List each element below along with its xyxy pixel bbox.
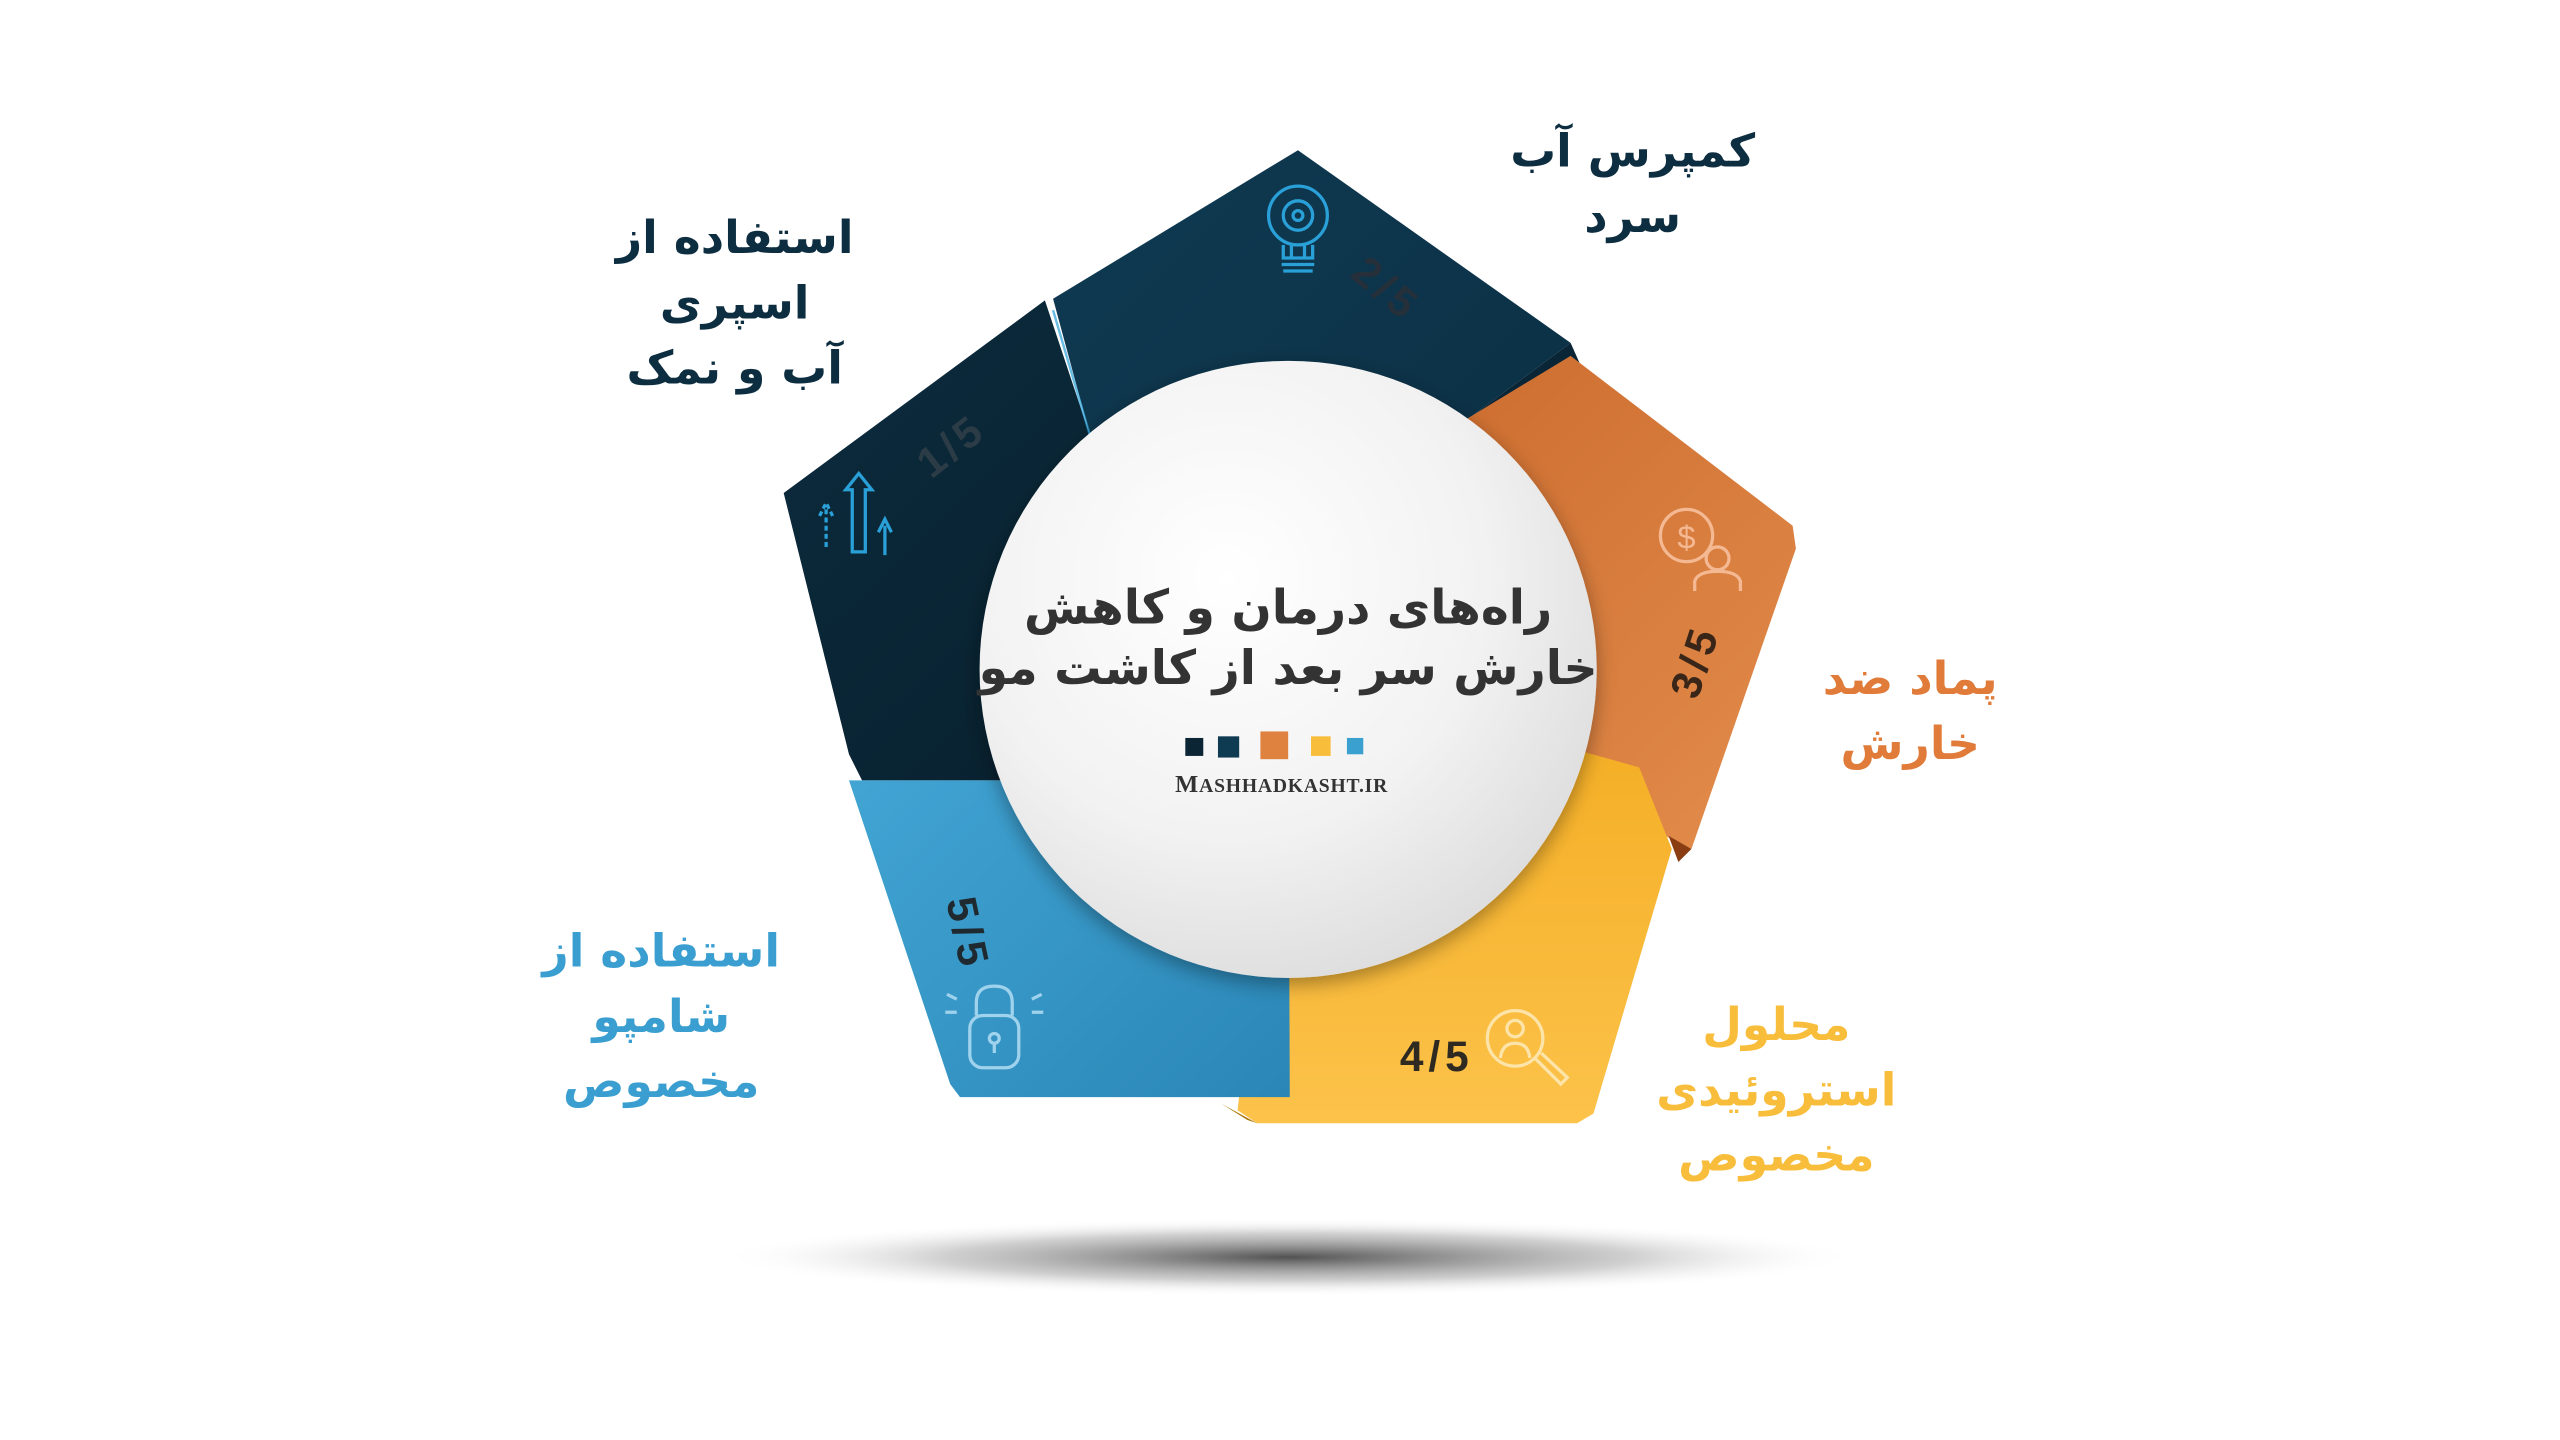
label: anti itch ointment: پماد ضد bbox=[1823, 652, 1998, 705]
segment 4/5 yellow bbox=[1221, 669, 1672, 1123]
label: special shampoo: استفاده از bbox=[540, 925, 780, 978]
label: steroid solution bbox=[1656, 998, 1896, 1182]
label: cold compress: کمپرس آب bbox=[1510, 123, 1756, 178]
floor shadow bbox=[717, 1218, 1860, 1296]
number 1/5: 1/5 bbox=[908, 404, 995, 487]
segment 1/5 dark navy bbox=[784, 300, 1288, 780]
label: anti itch ointment: خارش bbox=[1840, 717, 1980, 770]
icon: dollar person bbox=[1660, 509, 1740, 591]
label: anti itch ointment bbox=[1823, 652, 1998, 770]
label: salt water spray: آب و نمک bbox=[626, 340, 844, 395]
label: special shampoo bbox=[540, 925, 780, 1108]
icon: person magnifier bbox=[1487, 1011, 1567, 1084]
pentagon diagram bbox=[784, 150, 1796, 1123]
title: راه‌های درمان و کاهش bbox=[1024, 581, 1552, 636]
label: cold compress bbox=[1510, 123, 1756, 243]
label: salt water spray: استفاده از bbox=[614, 211, 854, 264]
label: steroid solution: محلول bbox=[1702, 998, 1850, 1051]
icon: lightbulb gear bbox=[1269, 186, 1327, 271]
number 4/5: 4/5 bbox=[1400, 1033, 1474, 1080]
number 2/5: 2/5 bbox=[1343, 247, 1430, 330]
icon: dollar person: $ bbox=[1677, 519, 1696, 556]
label: special shampoo: شامپو bbox=[590, 990, 730, 1043]
label: salt water spray: اسپری bbox=[660, 276, 809, 329]
center circle bbox=[977, 361, 1598, 978]
label: salt water spray bbox=[614, 211, 854, 395]
label: steroid solution: مخصوص bbox=[1678, 1129, 1875, 1182]
number 3/5: 3/5 bbox=[1661, 619, 1729, 704]
website: MASHHADKASHT.IR bbox=[1175, 771, 1388, 798]
label: steroid solution: استروئیدی bbox=[1656, 1063, 1896, 1116]
icon: lock bbox=[945, 986, 1043, 1068]
icon: arrows up bbox=[820, 473, 891, 555]
color squares bbox=[1185, 731, 1363, 759]
center circle: خارش سر بعد از کاشت مو bbox=[977, 641, 1598, 696]
label: cold compress: سرد bbox=[1584, 190, 1681, 243]
segment 3/5 orange bbox=[1288, 343, 1796, 862]
number 5/5: 5/5 bbox=[937, 893, 999, 975]
label: special shampoo: مخصوص bbox=[563, 1055, 759, 1108]
segment 2/5 navy bbox=[1053, 150, 1571, 669]
segment 5/5 blue bbox=[849, 669, 1290, 1097]
